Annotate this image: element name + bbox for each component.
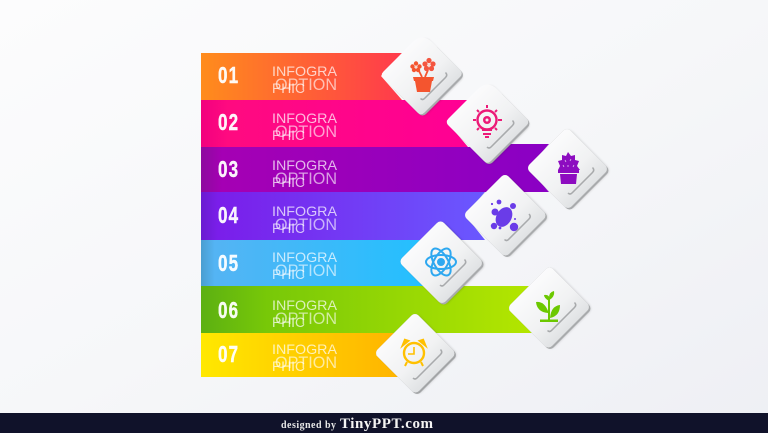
icon: flower pot bbox=[410, 58, 436, 92]
row 2 text bbox=[218, 110, 338, 143]
icon: cells bbox=[491, 200, 518, 231]
card 3 bbox=[526, 127, 610, 212]
row 7 text bbox=[218, 341, 338, 374]
icon: potted cactus bbox=[558, 152, 580, 184]
row 4 text: PHIC bbox=[272, 220, 305, 236]
row 4 text: OPTION bbox=[275, 215, 337, 234]
row 4 text bbox=[218, 203, 338, 236]
row 3 text: PHIC bbox=[272, 174, 305, 190]
bar 7 yellow bbox=[201, 333, 398, 377]
bar 5 blue bbox=[201, 240, 430, 286]
row 6 text: 06 bbox=[218, 299, 239, 324]
row 1 text bbox=[218, 63, 338, 96]
row 7 text: OPTION bbox=[275, 353, 337, 372]
bar 6 green bbox=[201, 286, 532, 333]
row 3 text: INFOGRA bbox=[272, 157, 338, 173]
row 2 text: PHIC bbox=[272, 127, 305, 143]
row 3 text: OPTION bbox=[275, 169, 337, 188]
row 6 text bbox=[218, 297, 338, 330]
bar 4 violet bbox=[201, 192, 485, 240]
card 1 bbox=[380, 32, 465, 118]
row 5 text: OPTION bbox=[275, 261, 337, 280]
icon: alarm clock bbox=[403, 340, 425, 366]
footer bar: designed by bbox=[281, 420, 336, 431]
card 2 bbox=[445, 80, 532, 166]
row 5 text: 05 bbox=[218, 252, 239, 277]
row 5 text bbox=[218, 249, 338, 282]
row 1 text: OPTION bbox=[275, 75, 337, 94]
card 6 bbox=[507, 266, 592, 351]
footer bar: TinyPPT.com bbox=[340, 416, 434, 432]
row 6 text: INFOGRA bbox=[272, 297, 338, 313]
bar 1 orange bbox=[201, 53, 402, 100]
card 4 bbox=[463, 173, 549, 259]
row 7 text: 07 bbox=[218, 343, 239, 368]
icon: atom bbox=[426, 246, 456, 278]
row 1 text: INFOGRA bbox=[272, 63, 338, 79]
card 7 bbox=[374, 312, 458, 396]
row 4 text: 04 bbox=[218, 204, 239, 229]
footer bar bbox=[0, 413, 768, 433]
bar 3 purple bbox=[201, 144, 549, 192]
row 5 text: INFOGRA bbox=[272, 249, 338, 265]
row 6 text: PHIC bbox=[272, 314, 305, 330]
row 2 text: OPTION bbox=[275, 122, 337, 141]
row 1 text: PHIC bbox=[272, 80, 305, 96]
row 1 text: 01 bbox=[218, 64, 239, 89]
row 6 text: OPTION bbox=[275, 309, 337, 328]
icon: seedling bbox=[536, 291, 560, 322]
card 5 bbox=[398, 220, 486, 306]
row 7 text: PHIC bbox=[272, 358, 305, 374]
row 7 text: INFOGRA bbox=[272, 341, 338, 357]
row 3 text bbox=[218, 157, 338, 190]
row 5 text: PHIC bbox=[272, 266, 305, 282]
icon: light bulb bbox=[473, 105, 502, 137]
row 2 text: INFOGRA bbox=[272, 110, 338, 126]
row 4 text: INFOGRA bbox=[272, 203, 338, 219]
row 3 text: 03 bbox=[218, 158, 239, 183]
row 2 text: 02 bbox=[218, 111, 239, 136]
bar 2 pink bbox=[201, 100, 468, 147]
